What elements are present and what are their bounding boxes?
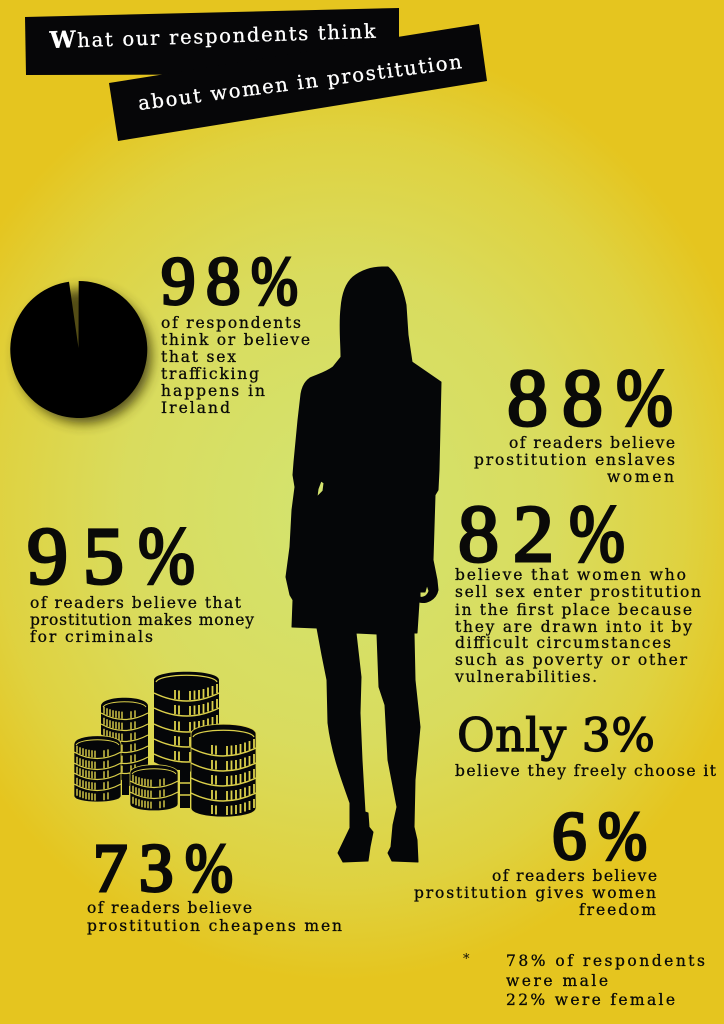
caption: 95%: for criminals xyxy=(30,628,153,646)
caption: 73% xyxy=(87,899,342,935)
caption: 98%: that sex xyxy=(161,348,236,366)
coin stack: tall back xyxy=(154,672,219,808)
stat: 98%: 9 xyxy=(161,243,196,319)
caption: 88%: women xyxy=(607,468,674,486)
caption: 98%: think or believe xyxy=(161,331,310,349)
caption: 82%: in the first place because xyxy=(455,601,692,619)
stat: 73%: % xyxy=(185,830,233,906)
stat: 82%: % xyxy=(569,488,625,579)
stat: 95%: % xyxy=(138,510,195,601)
footnote: respondent gender xyxy=(463,952,705,1009)
footnote: respondent gender: 78% of respondents xyxy=(506,952,705,970)
caption: 82%: such as poverty or other xyxy=(455,651,688,669)
stat: 6% xyxy=(414,798,657,919)
caption: 82% xyxy=(454,566,701,686)
caption: 6% xyxy=(414,867,657,919)
caption: 98%: trafficking xyxy=(161,365,259,383)
stat: 88%: 8 xyxy=(562,352,603,443)
caption: 98% xyxy=(161,314,310,417)
caption: 95%: of readers believe that xyxy=(30,594,242,612)
stat: 6%: 6 xyxy=(552,798,586,874)
title strip one: What our respondents think xyxy=(48,17,376,54)
stat: 98% xyxy=(161,243,310,417)
caption: 98%: of respondents xyxy=(161,314,301,332)
footnote: respondent gender: were male xyxy=(506,972,608,990)
stat: 6%: % xyxy=(598,798,647,874)
stat: 98%: 8 xyxy=(206,243,240,319)
caption: 73%: of readers believe xyxy=(87,899,252,917)
caption: 82%: they are drawn into it by xyxy=(455,618,692,636)
coin stack: middle left xyxy=(101,698,148,795)
stat: 88%: % xyxy=(616,352,673,443)
caption: only 3%: believe they freely choose it xyxy=(455,762,717,780)
caption: 88%: of readers believe xyxy=(509,434,675,452)
coin stack: small front xyxy=(130,765,178,811)
title strip one xyxy=(25,8,399,75)
caption: 98%: Ireland xyxy=(161,399,230,417)
stat: only 3% xyxy=(455,708,717,780)
stat: only 3%: Only 3% xyxy=(457,708,655,762)
title strip two: about women in prostitution xyxy=(137,50,463,115)
caption: 95%: prostitution makes money xyxy=(30,611,254,629)
caption: 6%: prostitution gives women xyxy=(414,884,656,902)
stat: 82%: 2 xyxy=(513,488,554,579)
caption: 82%: believe that women who xyxy=(455,566,686,584)
caption: 6%: of readers believe xyxy=(492,867,657,885)
stat: 95% xyxy=(27,510,254,646)
stat: 98%: % xyxy=(251,243,298,319)
footnote: respondent gender: * xyxy=(463,952,470,967)
caption: 82%: vulnerabilities. xyxy=(454,668,597,686)
stat: 82%: 8 xyxy=(458,488,499,579)
title banner xyxy=(25,8,487,141)
icon: stacks of coins xyxy=(74,672,256,817)
stat: 88%: 8 xyxy=(507,352,548,443)
stat: 73% xyxy=(87,830,342,935)
pie chart: 98% xyxy=(10,281,151,423)
stat: 73%: 3 xyxy=(139,830,174,906)
caption: 73%: prostitution cheapens men xyxy=(87,917,342,935)
stat: 88% xyxy=(474,352,675,486)
caption: 88%: prostitution enslaves xyxy=(474,451,675,469)
title strip two xyxy=(109,24,487,141)
stat: 73%: 7 xyxy=(93,830,128,906)
caption: 95% xyxy=(30,594,254,646)
caption: 82%: sell sex enter prostitution xyxy=(455,583,701,601)
caption: 6%: freedom xyxy=(579,901,656,919)
stat: 82% xyxy=(454,488,701,686)
caption: 98%: happens in xyxy=(161,382,265,400)
footnote: respondent gender: 22% were female xyxy=(506,991,675,1009)
caption: 82%: difficult circumstances xyxy=(455,634,671,652)
caption: 88% xyxy=(474,434,675,486)
coin stack: front right xyxy=(191,724,256,817)
stat: 95%: 5 xyxy=(83,510,124,601)
woman silhouette xyxy=(286,267,441,862)
stat: 95%: 9 xyxy=(27,510,68,601)
coin stack: front left xyxy=(74,736,121,802)
